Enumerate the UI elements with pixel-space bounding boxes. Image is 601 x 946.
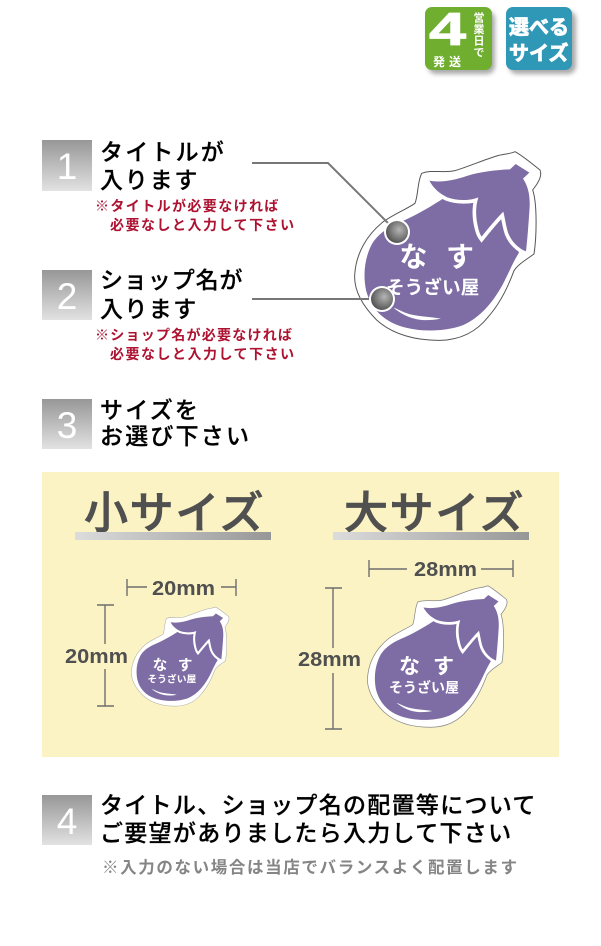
height dimension: large bbox=[298, 588, 361, 729]
number box 4 bbox=[42, 795, 92, 845]
step 3: size bbox=[42, 397, 251, 449]
heading 4: タイトル、ショップ名の配置等について bbox=[100, 792, 537, 818]
panel: sizes bbox=[42, 472, 559, 757]
number box 4: 4 bbox=[57, 801, 77, 842]
width dimension: small: 20mm bbox=[152, 578, 215, 600]
width dimension: small bbox=[127, 578, 236, 600]
number box 2 bbox=[42, 270, 92, 320]
heading: small size: 小サイズ bbox=[84, 489, 265, 538]
step 4: layout requests bbox=[42, 792, 537, 877]
number box 1: 1 bbox=[57, 146, 77, 187]
note 4: ※入力のない場合は当店でバランスよく配置します bbox=[102, 858, 519, 877]
heading 3: サイズを bbox=[100, 397, 200, 423]
underline: small size bbox=[75, 532, 271, 540]
heading 2: 入ります bbox=[100, 296, 198, 322]
note 2: ※ショップ名が必要なければ bbox=[95, 327, 293, 343]
eggplant sticker: large: そうざい屋 bbox=[389, 680, 459, 696]
heading 2: ショップ名が bbox=[100, 267, 243, 293]
badge: 4 business days shipping bbox=[425, 4, 495, 74]
heading 3: お選び下さい bbox=[100, 423, 251, 449]
badge: 4 business days shipping: 発送 bbox=[433, 54, 465, 69]
underline: large size bbox=[333, 532, 529, 540]
badge: 4 business days shipping: 4 bbox=[429, 4, 466, 55]
marker: title bbox=[384, 219, 410, 245]
eggplant sticker: large bbox=[367, 586, 507, 727]
eggplant sticker: main bbox=[355, 152, 541, 340]
note 1: 必要なしと入力して下さい bbox=[110, 217, 296, 233]
note 1: ※タイトルが必要なければ bbox=[95, 198, 280, 214]
eggplant sticker: large: なす bbox=[399, 655, 467, 678]
badge: 4 business days shipping: 営業日で bbox=[472, 11, 484, 58]
eggplant sticker: small: そうざい屋 bbox=[147, 672, 197, 685]
number box 3: 3 bbox=[57, 405, 77, 446]
number box 1 bbox=[42, 140, 92, 191]
step 1: title bbox=[42, 139, 296, 233]
heading 1: 入ります bbox=[100, 167, 199, 193]
number box 3 bbox=[42, 399, 92, 449]
number box 2: 2 bbox=[57, 276, 77, 317]
eggplant sticker: main: そうざい屋 bbox=[386, 277, 479, 298]
eggplant sticker: small bbox=[131, 607, 229, 706]
width dimension: large bbox=[369, 559, 513, 581]
heading 4: ご要望がありましたら入力して下さい bbox=[100, 820, 512, 846]
leader line: shop name bbox=[252, 298, 374, 300]
height dimension: large: 28mm bbox=[298, 649, 361, 671]
height dimension: small bbox=[65, 605, 128, 706]
note 2: 必要なしと入力して下さい bbox=[110, 346, 296, 362]
marker: shop name bbox=[369, 286, 395, 312]
step 2: shop name bbox=[42, 267, 296, 362]
eggplant sticker: small: なす bbox=[153, 657, 203, 674]
leader line: title bbox=[252, 163, 390, 225]
height dimension: small: 20mm bbox=[65, 646, 128, 668]
width dimension: large: 28mm bbox=[414, 559, 477, 581]
badge: selectable sizes: 選べる bbox=[509, 16, 569, 39]
heading: large size: 大サイズ bbox=[344, 489, 525, 538]
heading 1: タイトルが bbox=[100, 139, 226, 165]
eggplant sticker: main: なす bbox=[399, 242, 493, 273]
badge: selectable sizes bbox=[506, 7, 576, 74]
badge: selectable sizes: サイズ bbox=[509, 41, 568, 65]
